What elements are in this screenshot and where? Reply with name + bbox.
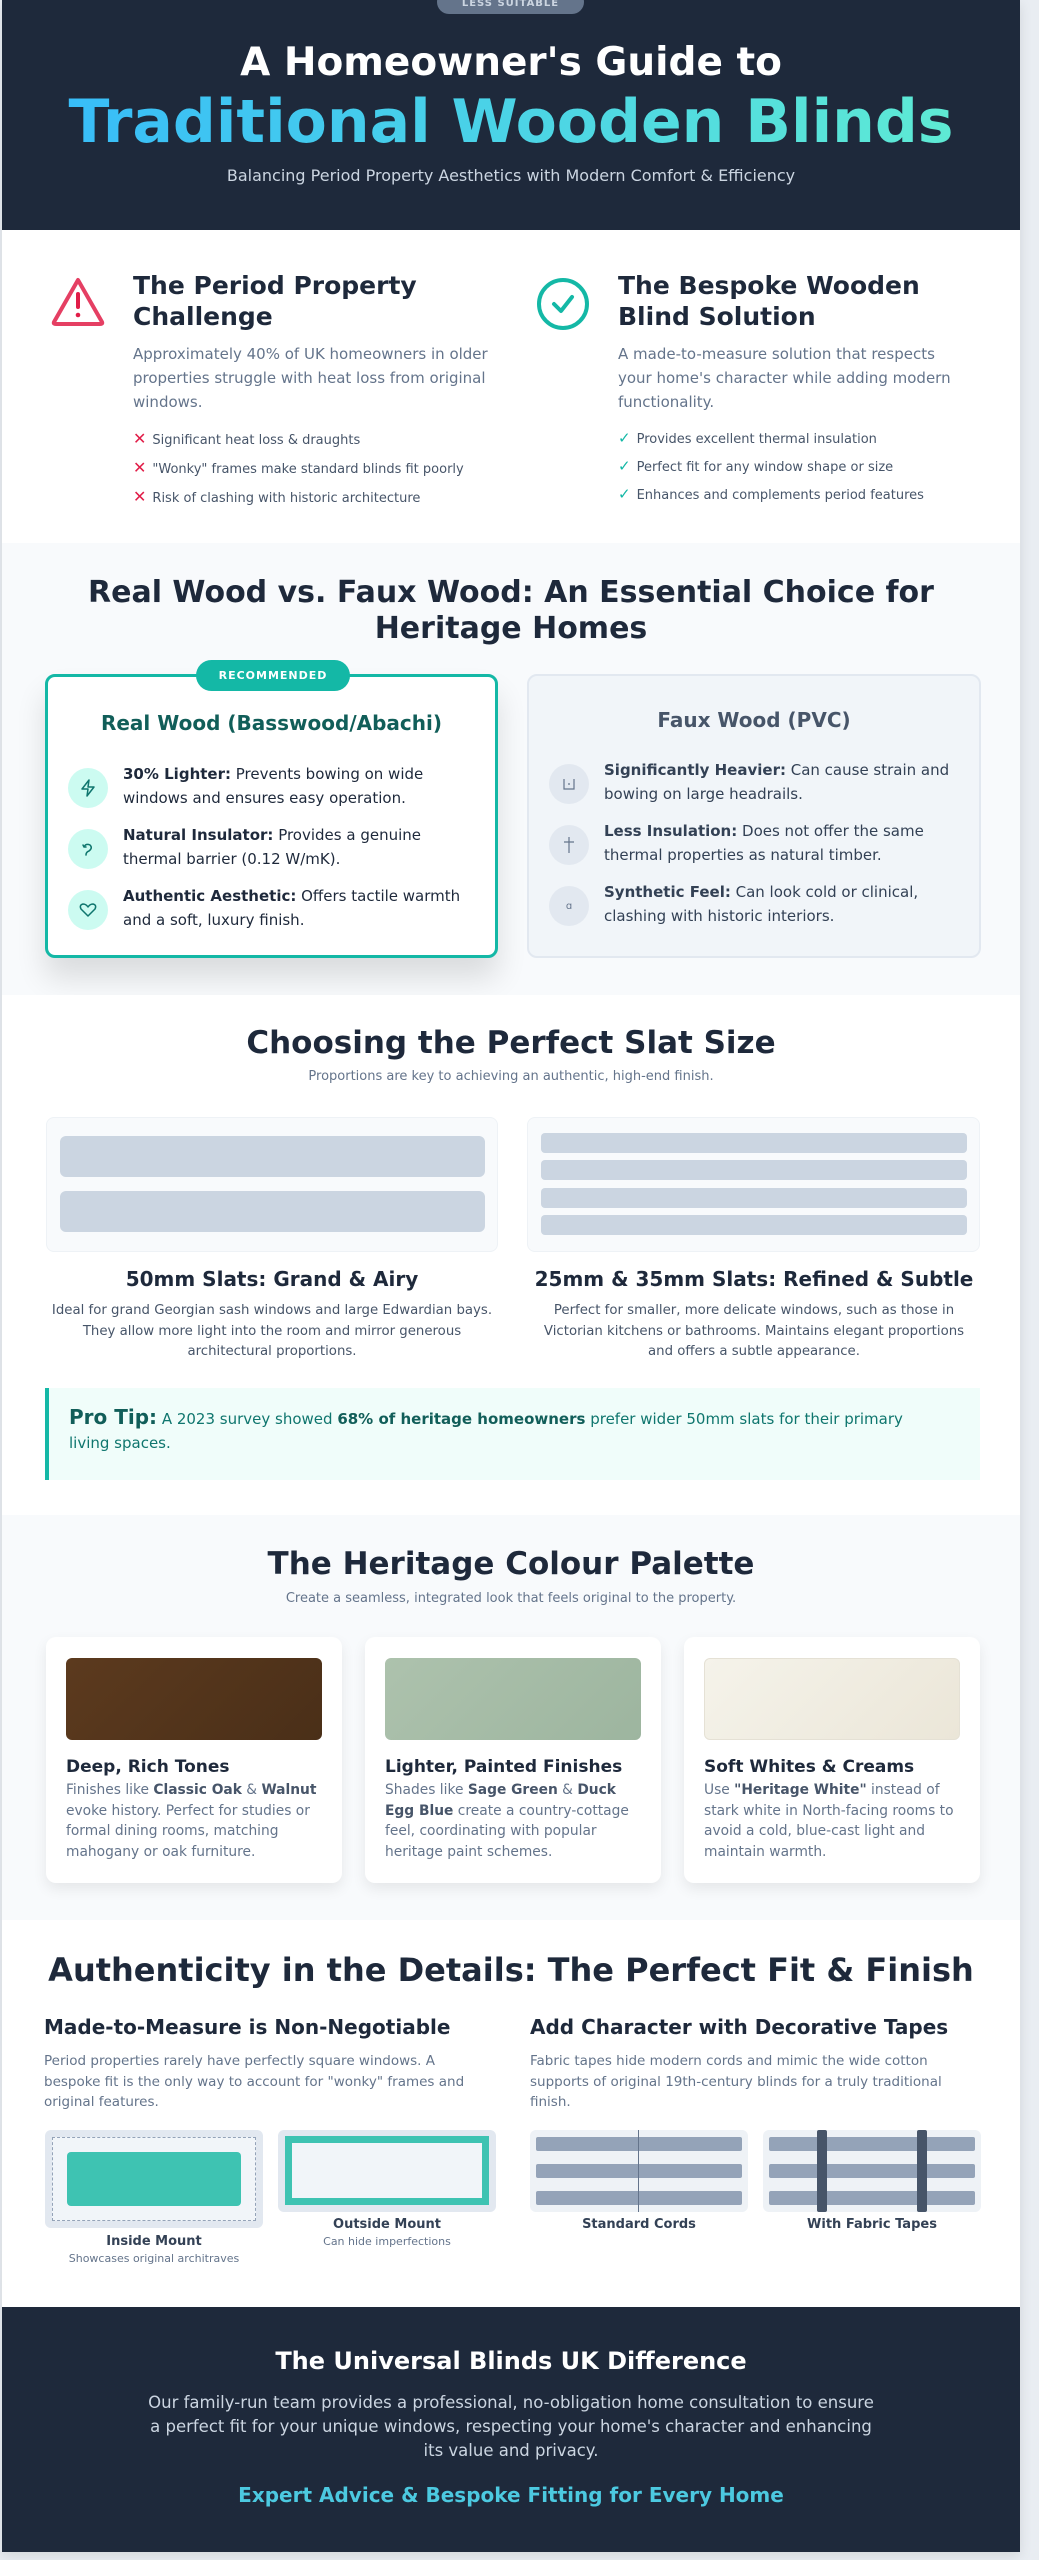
- text: 50mm: [52, 1267, 492, 1359]
- footer text: Our family-run team provides a professional, no-obligation home consultation to ensure: [148, 2393, 874, 2412]
- footer text: [148, 2393, 874, 2460]
- cta: Expert Advice & Bespoke Fitting for Every Home: [238, 2483, 784, 2507]
- item: insulator: Natural Insulator: Provides a genuine thermal barrier (0.12 W/mK).: [123, 826, 421, 868]
- card: painted finishes: [365, 1637, 661, 1883]
- heading: Choosing the Perfect Slat Size: [246, 1025, 776, 1061]
- list: [618, 429, 924, 503]
- text: A made-to-measure solution that respects your home's character while adding modern functionality.: [618, 345, 951, 411]
- list: ✓ Enhances and complements period features: [618, 485, 924, 503]
- list: [133, 429, 464, 506]
- panel: challenge: [52, 271, 488, 506]
- icon: check circle: [537, 278, 589, 330]
- text: Approximately 40% of UK homeowners in older properties struggle with heat loss from original windows.: [133, 345, 488, 411]
- card: painted finishes: Shades like Sage Green & Duck: [385, 1782, 616, 1798]
- text: 25/35mm: 25mm & 35mm Slats: Refined & Subtle: [535, 1267, 973, 1291]
- heading: The Heritage Colour Palette: [268, 1546, 754, 1582]
- block: decorative tapes: Add Character with Decorative Tapes: [530, 2015, 948, 2039]
- section: details: [2, 1920, 1020, 2307]
- heading: The Period Property Challenge: [133, 271, 417, 331]
- list: ✕ "Wonky" frames make standard blinds fit poorly: [133, 458, 464, 477]
- heading: Real Wood vs. Faux Wood: An Essential Choice for: [88, 575, 934, 610]
- item: lighter: 30% Lighter: Prevents bowing on wide windows and ensures easy operation.: [123, 765, 423, 807]
- block: made to measure: Made-to-Measure is Non-Negotiable: [44, 2015, 450, 2039]
- diagram: fabric tapes: [763, 2130, 981, 2212]
- header: [2, 0, 1020, 230]
- subtitle: Balancing Period Property Aesthetics with Modern Comfort & Efficiency: [227, 166, 795, 185]
- diagram: 50mm slats: [46, 1117, 498, 1252]
- badge: recommended: [196, 660, 350, 691]
- block: made to measure: Period properties rarely have perfectly square windows. A bespoke fit is the only way to account for "wonky" frames and original features.: [44, 2053, 464, 2110]
- item: less insulation: Less Insulation: Does not offer the same thermal properties as natural timber.: [604, 822, 924, 864]
- card: soft whites: [684, 1637, 980, 1883]
- diagram: inside mount: [45, 2130, 263, 2228]
- footer text: a perfect fit for your unique windows, respecting your home's character and enhancing: [150, 2417, 872, 2436]
- block: decorative tapes: [530, 2015, 948, 2110]
- label: inside mount: Showcases original architraves: [69, 2252, 239, 2265]
- list: ✕ Significant heat loss & draughts: [133, 429, 360, 448]
- section: colour palette: [2, 1515, 1020, 1920]
- label: standard cords: Standard Cords: [582, 2217, 696, 2232]
- item: aesthetic: Authentic Aesthetic: Offers tactile warmth and a soft, luxury finish.: [123, 887, 460, 929]
- footer heading: The Universal Blinds UK Difference: [275, 2347, 747, 2375]
- card: deep tones: [46, 1637, 342, 1883]
- card: soft whites: Use "Heritage White" instead of stark white in North-facing rooms to avoid a cold, blue-cast light and maintain warmth.: [704, 1782, 954, 1860]
- diagram: 25/35mm slats: [527, 1117, 980, 1252]
- text: 25/35mm: Perfect for smaller, more delicate windows, such as those in Victorian kitchens or bathrooms. Maintains elegant proportions and offers a subtle appearance.: [544, 1303, 964, 1359]
- text: 50mm: Ideal for grand Georgian sash windows and large Edwardian bays. They allow more light into the room and mirror generous architectural proportions.: [52, 1303, 492, 1359]
- card title: Faux Wood (PVC): [657, 708, 851, 732]
- diagram: standard cords: [530, 2130, 748, 2212]
- heading: Authenticity in the Details: The Perfect Fit & Finish: [48, 1951, 974, 1989]
- heading: Heritage Homes: [375, 611, 647, 646]
- heading: The Bespoke Wooden Blind Solution: [618, 271, 920, 331]
- list: ✓ Perfect fit for any window shape or size: [618, 457, 893, 475]
- section: slat size: [2, 995, 1020, 1515]
- badge: less suitable: [437, 0, 584, 14]
- item: heavier: Significantly Heavier: Can cause strain and bowing on large headrails.: [604, 761, 949, 803]
- label: fabric tapes: With Fabric Tapes: [807, 2217, 937, 2232]
- block: made to measure: [44, 2015, 464, 2110]
- card: deep tones: Deep, Rich Tones: [66, 1757, 230, 1777]
- card: painted finishes: Egg Blue create a country-cottage feel, coordinating with popular heritage paint schemes.: [385, 1802, 629, 1860]
- card: deep tones: Finishes like Classic Oak & Walnut evoke history. Perfect for studies or formal dining rooms, matching mahogany or oak furniture.: [66, 1782, 316, 1860]
- footer: [2, 2307, 1020, 2552]
- item: synthetic: Synthetic Feel: Can look cold or clinical, clashing with historic interiors.: [604, 883, 918, 925]
- label: outside mount: [323, 2217, 451, 2248]
- diagram: outside mount: [278, 2130, 496, 2212]
- panel: solution: [537, 271, 951, 503]
- section: real vs faux: [2, 543, 1020, 995]
- label: outside mount: Can hide imperfections: [323, 2235, 451, 2248]
- badge: recommended: RECOMMENDED: [219, 669, 327, 682]
- title: A Homeowner's Guide to: [240, 40, 782, 85]
- title highlight: Traditional Wooden Blinds: [68, 87, 954, 157]
- heading: [88, 575, 934, 646]
- card: painted finishes: Lighter, Painted Finishes: [385, 1757, 622, 1777]
- block: decorative tapes: Fabric tapes hide modern cords and mimic the wide cotton supports of original 19th-century blinds for a truly traditional finish.: [530, 2053, 942, 2110]
- callout: pro tip: [45, 1388, 980, 1480]
- card: soft whites: Soft Whites & Creams: [704, 1757, 914, 1777]
- subtitle: Create a seamless, integrated look that feels original to the property.: [286, 1591, 736, 1606]
- subtitle: Proportions are key to achieving an authentic, high-end finish.: [308, 1069, 714, 1084]
- icon: warning: [52, 278, 104, 326]
- label: inside mount: Inside Mount: [106, 2234, 202, 2249]
- callout: pro tip: Pro Tip: A 2023 survey showed 68% of heritage homeowners prefer wider 50mm slats for their primary: [69, 1405, 903, 1429]
- list: ✓ Provides excellent thermal insulation: [618, 429, 877, 447]
- card: real wood: [45, 674, 498, 958]
- label: outside mount: Outside Mount: [333, 2217, 441, 2232]
- label: inside mount: [69, 2234, 239, 2265]
- item: synthetic: ɑ: [566, 900, 572, 912]
- list: ✕ Risk of clashing with historic architecture: [133, 487, 420, 506]
- card: faux wood: [527, 674, 981, 958]
- text: 50mm: 50mm Slats: Grand & Airy: [126, 1267, 418, 1291]
- footer text: its value and privacy.: [424, 2441, 598, 2460]
- callout: pro tip: living spaces.: [69, 1434, 171, 1452]
- card title: Real Wood (Basswood/Abachi): [101, 711, 442, 735]
- text: 25/35mm: [535, 1267, 973, 1359]
